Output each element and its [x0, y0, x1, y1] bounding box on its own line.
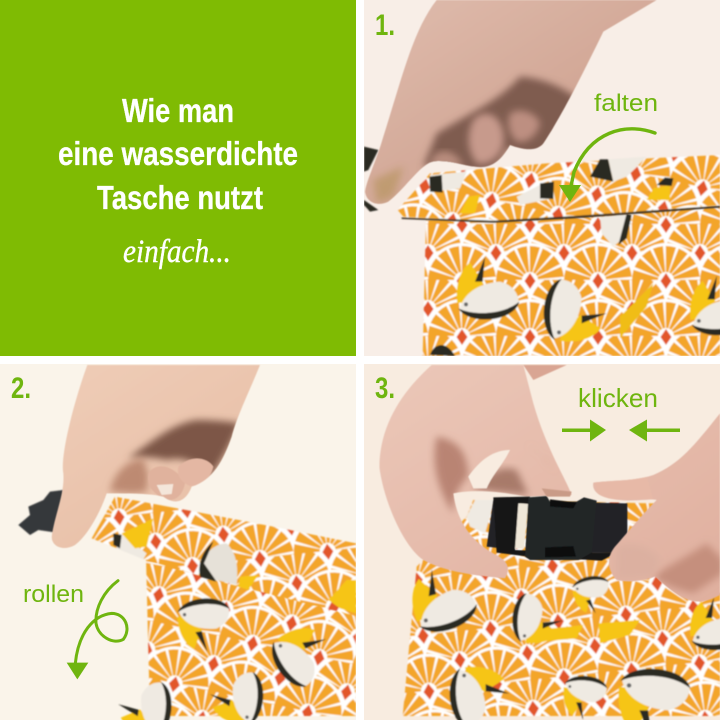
bag body	[403, 500, 720, 720]
panel: step 1	[360, 0, 720, 356]
number 1: 1.	[375, 9, 395, 42]
strap end	[364, 147, 378, 212]
hand: right	[592, 414, 720, 602]
panel: title	[0, 0, 356, 356]
step 2 photo	[0, 360, 360, 720]
arrow: right-pointing	[562, 420, 606, 442]
label falten: falten	[594, 90, 658, 117]
panel: step 2	[0, 360, 360, 720]
panel: step 3	[360, 360, 720, 720]
step 3 photo	[360, 360, 720, 720]
arrow: left-pointing	[629, 420, 680, 442]
number 3: 3.	[375, 372, 395, 405]
label rollen: rollen	[23, 581, 84, 608]
heading	[58, 92, 298, 216]
buckle	[487, 496, 627, 561]
hand	[51, 364, 260, 548]
number 2: 2.	[11, 372, 31, 405]
step 1 photo	[360, 0, 720, 356]
heading: Tasche nutzt	[97, 179, 263, 216]
buckle held in hand	[18, 490, 63, 535]
hand	[364, 0, 656, 204]
arrow: falten	[559, 129, 655, 202]
fingertip: left thumb nail	[542, 488, 572, 497]
hand: left	[379, 364, 572, 579]
subtitle: einfach...	[123, 234, 231, 270]
rolled top	[92, 497, 356, 616]
fold flap	[398, 155, 720, 223]
arrow: rollen	[67, 581, 127, 679]
heading: eine wasserdichte	[58, 135, 298, 172]
label klicken: klicken	[578, 383, 658, 413]
bag body	[114, 557, 356, 720]
bag body	[423, 207, 720, 356]
heading: Wie man	[122, 92, 234, 129]
